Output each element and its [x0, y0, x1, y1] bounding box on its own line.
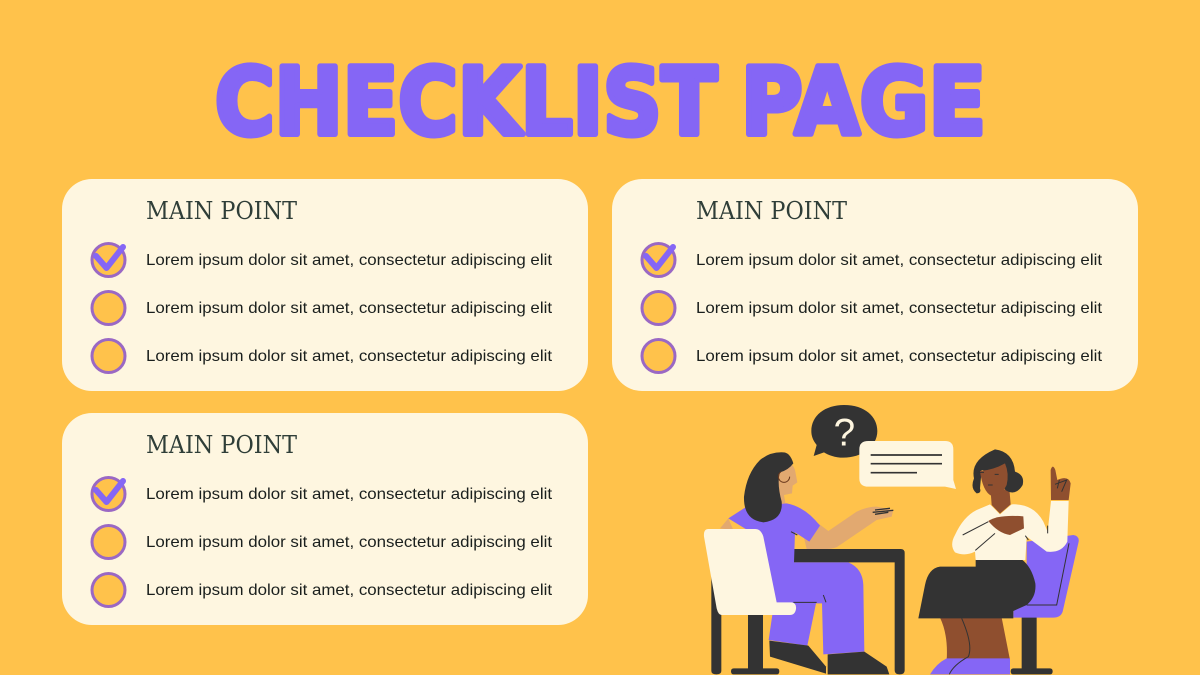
heading: bottom left: MAIN POINT	[146, 431, 297, 459]
left chair legs	[711, 575, 779, 674]
checked item: bottom left row 1	[92, 478, 553, 510]
illustration: two people talking at a table	[704, 405, 1079, 674]
question speech bubble: ?	[834, 412, 855, 455]
hair	[972, 449, 1023, 493]
title: PAGE	[741, 48, 986, 156]
right chair	[1011, 535, 1079, 674]
heading: top left: MAIN POINT	[146, 197, 297, 225]
arm	[803, 507, 893, 549]
checked item: top left row 1	[92, 244, 553, 276]
item: bottom left row 2: Lorem ipsum dolor sit amet, consectetur adipiscing elit	[146, 534, 553, 551]
face	[980, 463, 1008, 496]
item: bottom left row 3	[92, 574, 553, 606]
checked item: bottom left row 1: Lorem ipsum dolor sit amet, consectetur adipiscing elit	[146, 486, 553, 503]
item: bottom left row 2	[92, 526, 553, 558]
item: top right row 3	[642, 340, 1103, 372]
item: top left row 3: Lorem ipsum dolor sit amet, consectetur adipiscing elit	[146, 348, 553, 365]
left chair seat and back	[704, 529, 796, 615]
item: bottom left row 3: Lorem ipsum dolor sit amet, consectetur adipiscing elit	[146, 582, 553, 599]
face and neck	[773, 462, 797, 508]
item: top left row 2: Lorem ipsum dolor sit amet, consectetur adipiscing elit	[146, 300, 553, 317]
woman on the left	[720, 452, 893, 674]
table	[794, 549, 905, 674]
panel: bottom left checklist	[62, 413, 588, 625]
woman on the right	[918, 449, 1071, 674]
top and trousers	[728, 503, 864, 654]
item: top right row 3: Lorem ipsum dolor sit amet, consectetur adipiscing elit	[696, 348, 1103, 365]
skirt	[918, 559, 1035, 618]
shoes	[769, 641, 826, 674]
item: top right row 2: Lorem ipsum dolor sit amet, consectetur adipiscing elit	[696, 300, 1103, 317]
text speech bubble	[859, 441, 956, 489]
panel: top right checklist	[612, 179, 1138, 391]
title: CHECKLIST	[215, 48, 717, 156]
checked item: top right row 1: Lorem ipsum dolor sit amet, consectetur adipiscing elit	[696, 252, 1103, 269]
neck	[991, 488, 1011, 514]
legs	[940, 618, 1010, 660]
socks	[930, 658, 1010, 674]
hand on chest	[988, 516, 1024, 535]
item: top left row 2	[92, 292, 553, 324]
item: top right row 2	[642, 292, 1103, 324]
raised hand	[1051, 467, 1071, 500]
hair	[744, 452, 793, 522]
question speech bubble	[811, 405, 877, 458]
panel: top left checklist	[62, 179, 588, 391]
heading: top right: MAIN POINT	[696, 197, 847, 225]
blouse	[952, 501, 1069, 560]
item: top left row 3	[92, 340, 553, 372]
checked item: top left row 1: Lorem ipsum dolor sit amet, consectetur adipiscing elit	[146, 252, 553, 269]
checked item: top right row 1	[642, 244, 1103, 276]
